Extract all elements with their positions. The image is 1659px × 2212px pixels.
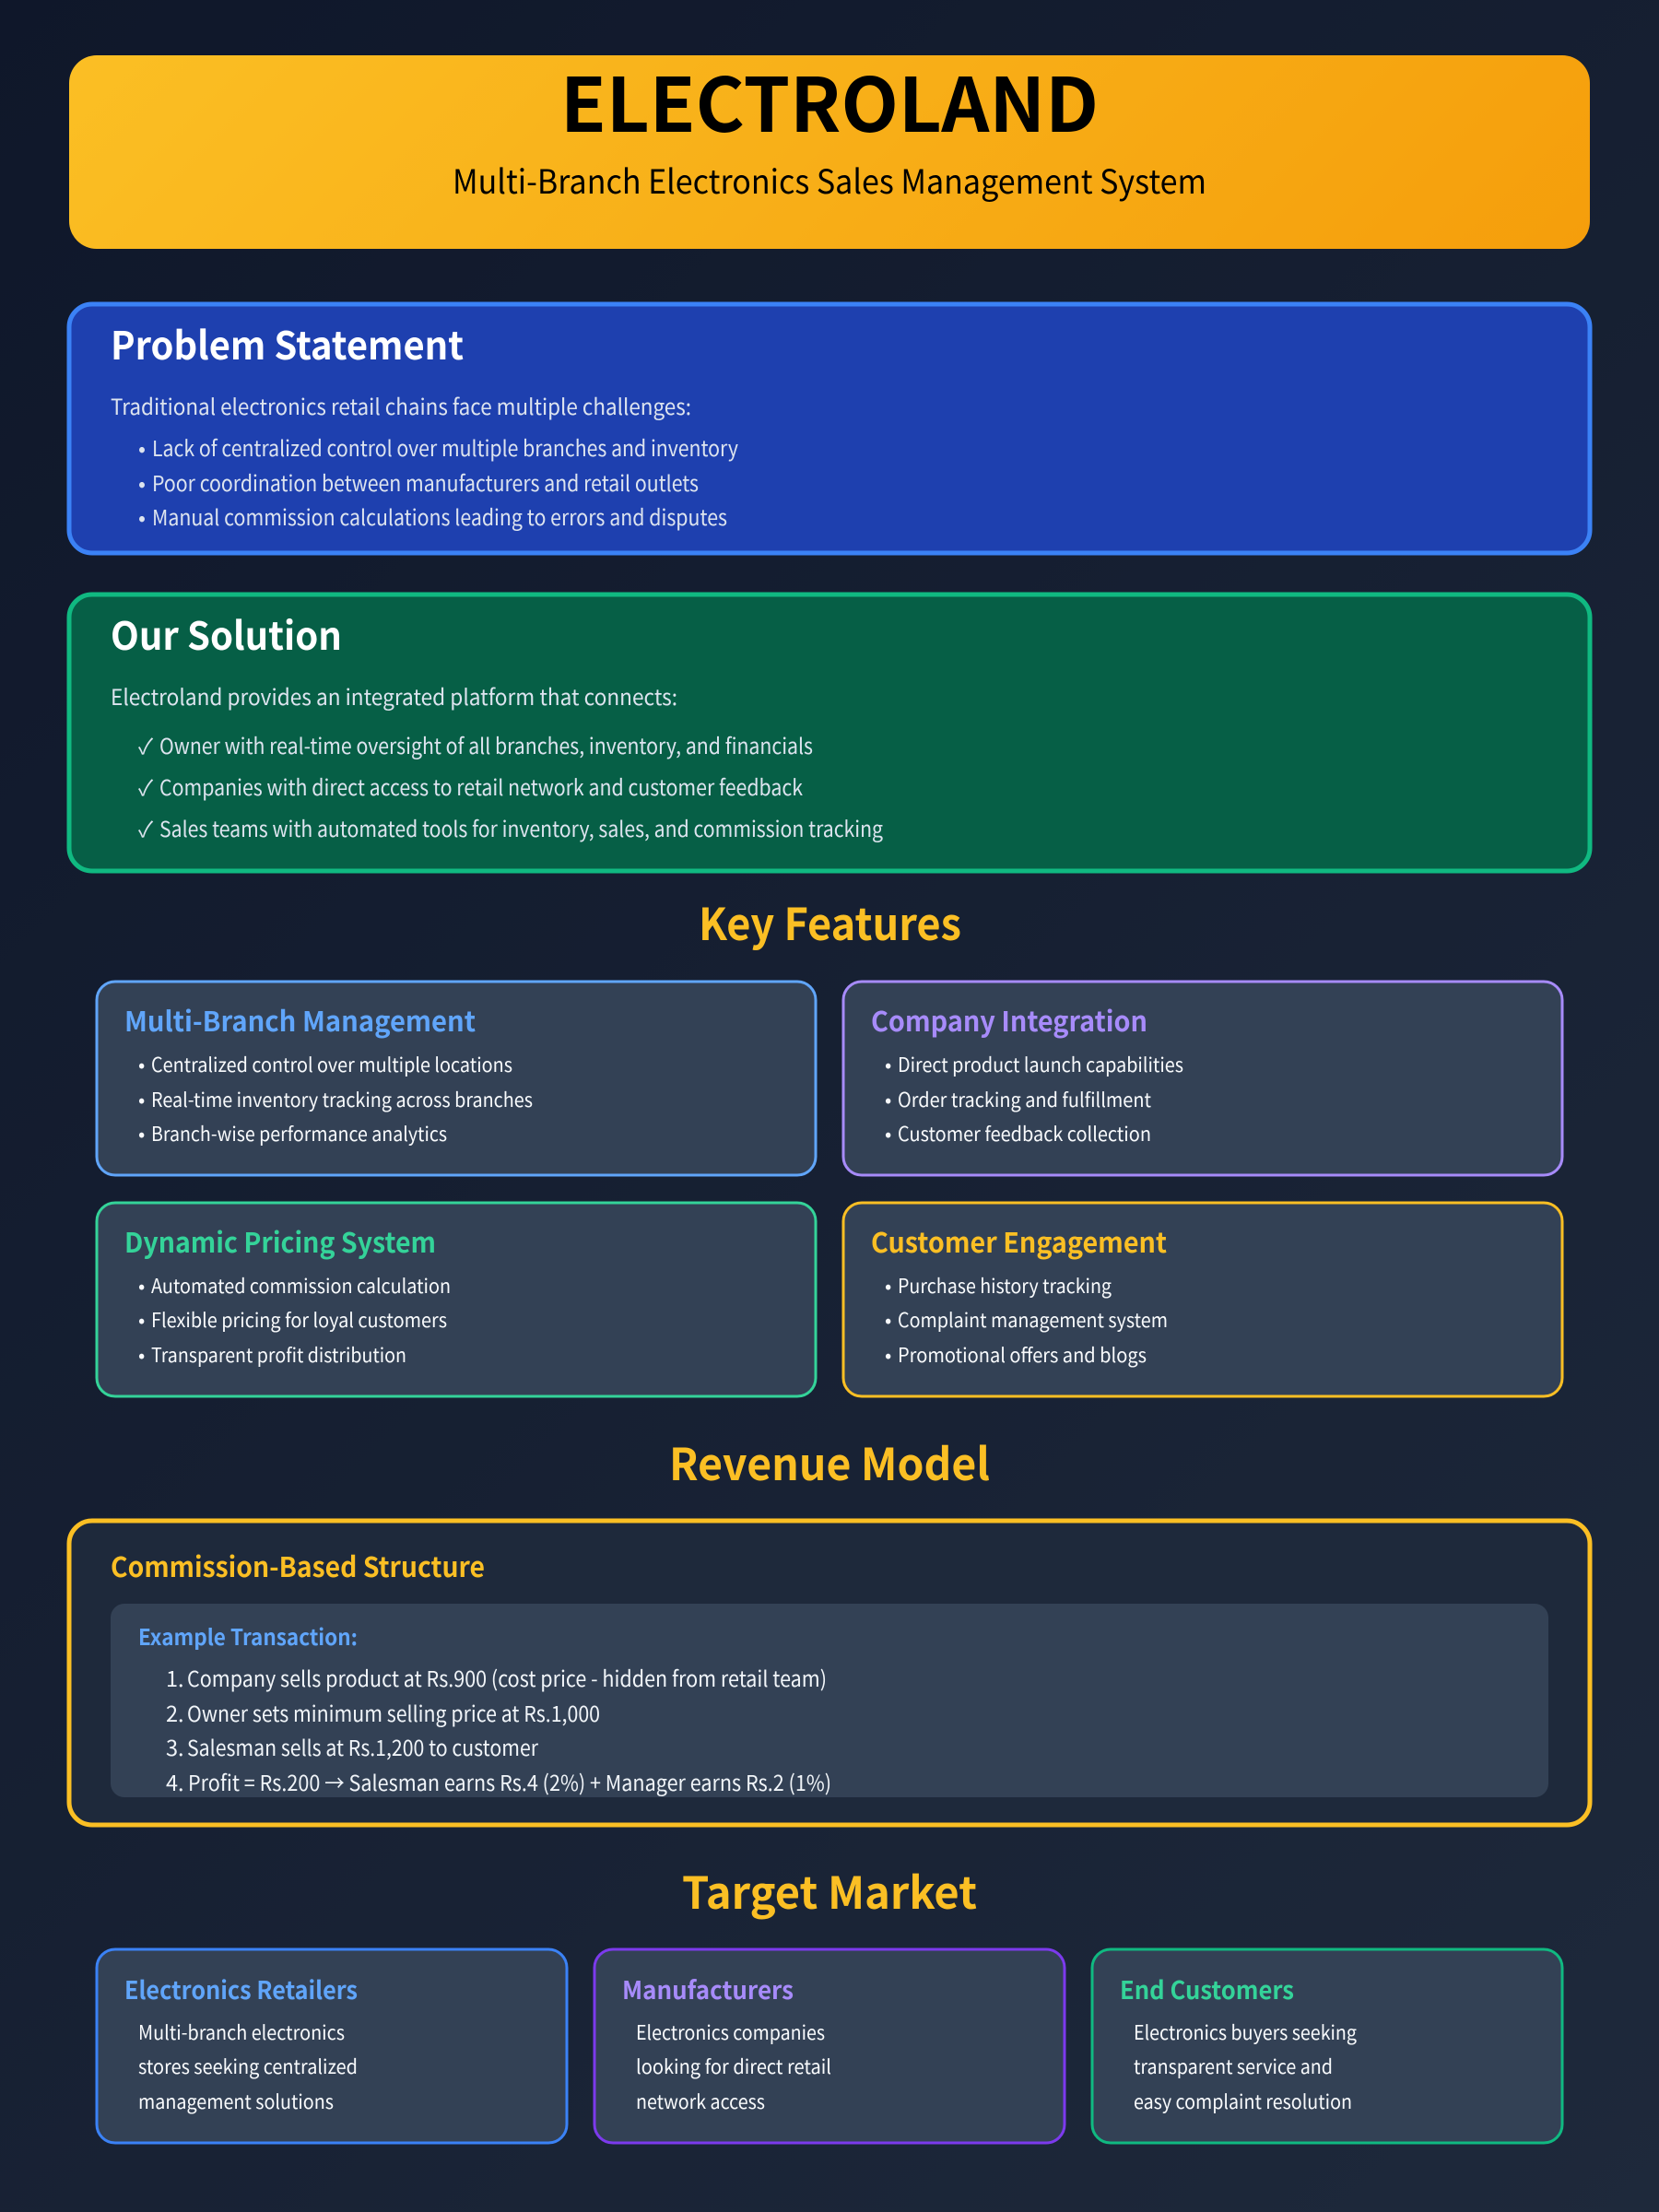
step 3: 3. [166,1731,184,1762]
card: electronics retailers [97,1949,567,2143]
card box [97,1203,816,1396]
item 3: Transparent profit distribution [151,1340,406,1369]
card box [1092,1949,1562,2143]
item 2: Order tracking and fulfillment [898,1085,1151,1113]
problem bullet 1: • [138,431,146,463]
card title: Company Integration [871,999,1147,1040]
item 3: • [885,1119,891,1147]
problem bullet 2: • [138,466,146,498]
panel: problem statement [69,304,1590,553]
step 4: Profit = Rs.200 → Salesman earns Rs.4 (2%) + Manager earns Rs.2 (1%) [188,1766,831,1797]
card title: Manufacturers [622,1971,794,2006]
item 2: • [885,1305,891,1334]
revenue subheading: Commission-Based Structure [111,1545,485,1585]
step 3: Salesman sells at Rs.1,200 to customer [187,1731,539,1762]
solution point 2: Companies with direct access to retail network and customer feedback [159,771,803,802]
item 1: Direct product launch capabilities [898,1050,1183,1078]
item 3: Branch-wise performance analytics [151,1119,447,1147]
example heading: Example Transaction: [138,1619,358,1652]
revenue panel box [69,1521,1590,1825]
card box [97,982,816,1175]
card box [843,1203,1562,1396]
item 3: • [885,1340,891,1369]
item 1: Purchase history tracking [898,1271,1112,1300]
line 1: Electronics companies [636,2018,825,2046]
card title: Multi-Branch Management [124,999,476,1040]
card: company integration [843,982,1562,1175]
item 3: • [138,1119,145,1147]
step 4: 4. [166,1766,184,1797]
problem panel box [69,304,1590,553]
solution point 2: ✓ [138,771,154,802]
card title: Customer Engagement [871,1220,1167,1261]
card: end customers [1092,1949,1562,2143]
item 3: Customer feedback collection [898,1119,1151,1147]
item 1: • [138,1050,145,1078]
step 1: 1. [166,1662,184,1693]
item 2: Real-time inventory tracking across branches [151,1085,533,1113]
panel: revenue model [69,1521,1590,1825]
line 3: easy complaint resolution [1134,2087,1352,2115]
item 2: • [138,1085,145,1113]
header banner [69,55,1590,249]
item 2: • [138,1305,145,1334]
item 3: • [138,1340,145,1369]
panel: header [69,46,1590,249]
item 1: • [138,1271,145,1300]
panel: our solution [69,594,1590,871]
problem intro: Traditional electronics retail chains face multiple challenges: [111,389,691,421]
solution point 1: Owner with real-time oversight of all branches, inventory, and financials [159,729,813,760]
item 1: Automated commission calculation [151,1271,451,1300]
problem bullet 2: Poor coordination between manufacturers and retail outlets [152,466,699,498]
card: multi-branch management [97,982,816,1175]
line 2: stores seeking centralized [138,2052,358,2080]
problem bullet 3: • [138,500,146,532]
subtitle: Multi-Branch Electronics Sales Management System [453,156,1206,204]
item 1: • [885,1271,891,1300]
item 1: • [885,1050,891,1078]
item 2: Complaint management system [898,1305,1168,1334]
solution point 3: ✓ [138,812,154,843]
card box [843,982,1562,1175]
solution intro: Electroland provides an integrated platform that connects: [111,679,677,712]
card: manufacturers [594,1949,1065,2143]
solution panel box [69,594,1590,871]
item 3: Promotional offers and blogs [898,1340,1147,1369]
card title: Dynamic Pricing System [124,1220,436,1261]
card: customer engagement [843,1203,1562,1396]
card box [594,1949,1065,2143]
line 1: Multi-branch electronics [138,2018,345,2046]
card box [97,1949,567,2143]
line 3: network access [636,2087,765,2115]
heading: key features: Key Features [699,888,961,953]
card title: End Customers [1120,1971,1294,2006]
item 2: Flexible pricing for loyal customers [151,1305,447,1334]
line 3: management solutions [138,2087,334,2115]
problem bullet 3: Manual commission calculations leading to errors and disputes [152,500,727,532]
problem bullet 1: Lack of centralized control over multiple branches and inventory [152,431,738,463]
example transaction box [111,1604,1548,1797]
line 2: transparent service and [1134,2052,1333,2080]
problem heading: Problem Statement [111,315,464,371]
heading: target market: Target Market [682,1857,977,1922]
title: ELECTROLAND [560,46,1099,154]
line 1: Electronics buyers seeking [1134,2018,1357,2046]
example background [111,1604,1548,1797]
step 1: Company sells product at Rs.900 (cost price - hidden from retail team) [187,1662,827,1693]
solution heading: Our Solution [111,606,342,662]
card: dynamic pricing system [97,1203,816,1396]
heading: revenue model: Revenue Model [669,1429,990,1493]
step 2: 2. [166,1697,184,1728]
item 1: Centralized control over multiple locations [151,1050,512,1078]
card title: Electronics Retailers [124,1971,358,2006]
solution point 3: Sales teams with automated tools for inventory, sales, and commission tracking [159,812,883,843]
step 2: Owner sets minimum selling price at Rs.1,000 [187,1697,600,1728]
item 2: • [885,1085,891,1113]
line 2: looking for direct retail [636,2052,831,2080]
solution point 1: ✓ [138,729,154,760]
